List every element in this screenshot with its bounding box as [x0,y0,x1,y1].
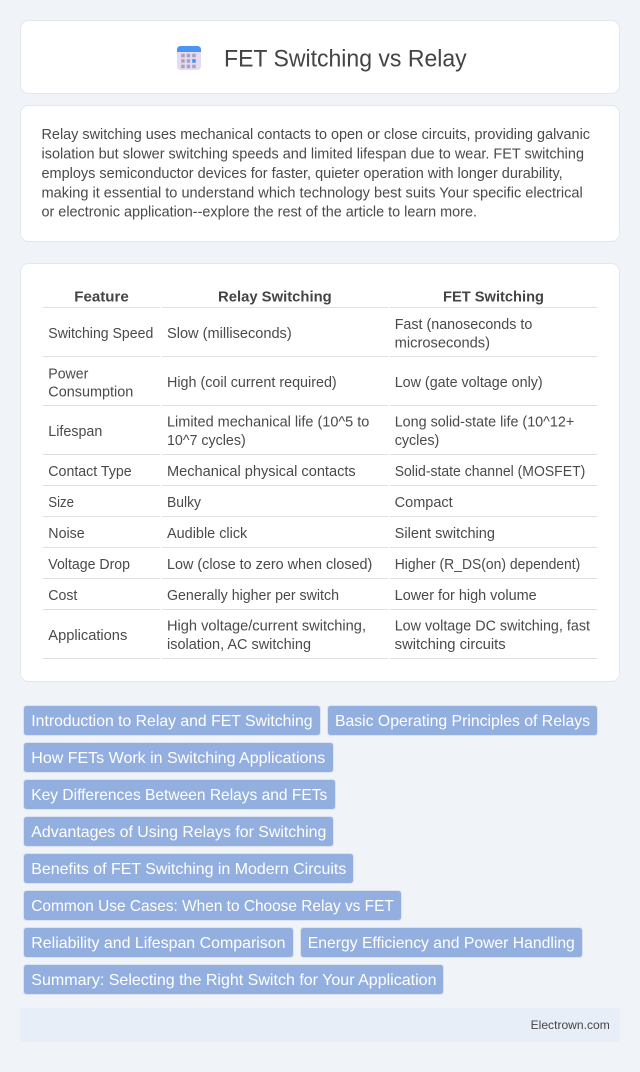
panel: comparison table [20,264,620,682]
tag: how FETs work: How FETs Work in Switching Applications [31,750,325,767]
tag: energy efficiency [300,928,582,958]
row: switching speed [48,317,532,351]
table header row [74,288,544,305]
row: cost: Lower for high volume [395,588,537,604]
row: cost: Cost [48,588,77,604]
tag: relay advantages [24,816,334,846]
tag: introduction [24,706,320,736]
row: contact type: Contact Type [48,464,132,480]
row: switching speed: Slow (milliseconds) [167,326,292,342]
row: applications: Low voltage DC switching, fast [395,619,590,635]
tag: FET benefits [24,854,354,884]
row: applications: High voltage/current switching, [167,619,366,635]
row: lifespan: Limited mechanical life (10^5 to [167,415,369,431]
row: lifespan: Lifespan [48,424,102,440]
row: power consumption: High (coil current required) [167,375,337,391]
row: applications [48,619,590,653]
tag: key differences: Key Differences Between Relays and FETs [31,787,327,804]
text block: introduction: making it essential to understand which technology best suits Your specific electrical [42,185,583,201]
tag: operating principles: Basic Operating Principles of Relays [335,713,590,730]
tag: summary [24,964,444,994]
row: lifespan [48,415,574,449]
row: power consumption: Consumption [48,384,133,400]
row: lifespan: cycles) [395,433,439,449]
tag: use cases: Common Use Cases: When to Choose Relay vs FET [31,898,394,915]
tag: introduction: Introduction to Relay and FET Switching [31,713,313,730]
row: applications: Applications [48,628,127,644]
text block: introduction [42,127,590,221]
row: noise: Silent switching [395,526,495,542]
tag: FET benefits: Benefits of FET Switching in Modern Circuits [31,861,346,878]
tag: operating principles [328,706,598,736]
row: applications: switching circuits [395,637,506,653]
row: size: Bulky [167,495,202,511]
tag: energy efficiency: Energy Efficiency and Power Handling [308,935,575,952]
row: cost [48,588,537,604]
footer credit: Electrown.com [531,1018,610,1032]
panel: introduction paragraph [20,106,620,242]
text block: introduction: or electronic application--explore the rest of the article to learn more. [42,205,477,221]
table header row: FET Switching [443,288,544,305]
tag: key differences [24,780,336,810]
row: lifespan: Long solid-state life (10^12+ [395,415,574,431]
text block: introduction: employs semiconductor devices for faster, quieter operation with longer durability, [42,166,563,182]
row: contact type: Mechanical physical contacts [167,464,356,480]
title: FET Switching vs Relay [224,46,467,73]
row: switching speed: microseconds) [395,335,490,351]
row: contact type [48,464,585,480]
topic tags [24,706,598,994]
icon: calendar grid [177,46,201,70]
row: voltage drop [48,557,580,573]
row: noise [48,526,495,542]
row: power consumption: Low (gate voltage only) [395,375,543,391]
row: voltage drop: Voltage Drop [48,557,130,573]
row: power consumption: Power [48,366,88,382]
row: voltage drop: Higher (R_DS(on) dependent) [395,557,580,573]
tag: summary: Summary: Selecting the Right Switch for Your Application [31,972,437,989]
row: switching speed: Fast (nanoseconds to [395,317,532,333]
row: voltage drop: Low (close to zero when closed) [167,557,372,573]
table header row: Feature [74,288,129,305]
tag: how FETs work [24,742,334,772]
row: size: Compact [395,495,453,511]
tag: use cases [24,890,402,920]
row: noise: Audible click [167,526,248,542]
text block: introduction: isolation but slower switching speeds and limited lifespan due to wear. FET switching [42,146,584,162]
row: switching speed: Switching Speed [48,326,153,342]
panel: header [20,20,620,94]
row: contact type: Solid-state channel (MOSFET) [395,464,585,480]
footer [20,1008,620,1042]
row: size [48,495,453,511]
table header row: Relay Switching [218,288,332,305]
tag: reliability: Reliability and Lifespan Comparison [31,935,285,952]
row: lifespan: 10^7 cycles) [167,433,246,449]
row: applications: isolation, AC switching [167,637,311,653]
row: power consumption [48,366,543,400]
tag: relay advantages: Advantages of Using Relays for Switching [31,824,326,841]
row: cost: Generally higher per switch [167,588,339,604]
text block: introduction: Relay switching uses mechanical contacts to open or close circuits, providing galvanic [42,127,590,143]
row: noise: Noise [48,526,85,542]
tag: reliability [24,928,294,958]
row: size: Size [48,495,74,511]
